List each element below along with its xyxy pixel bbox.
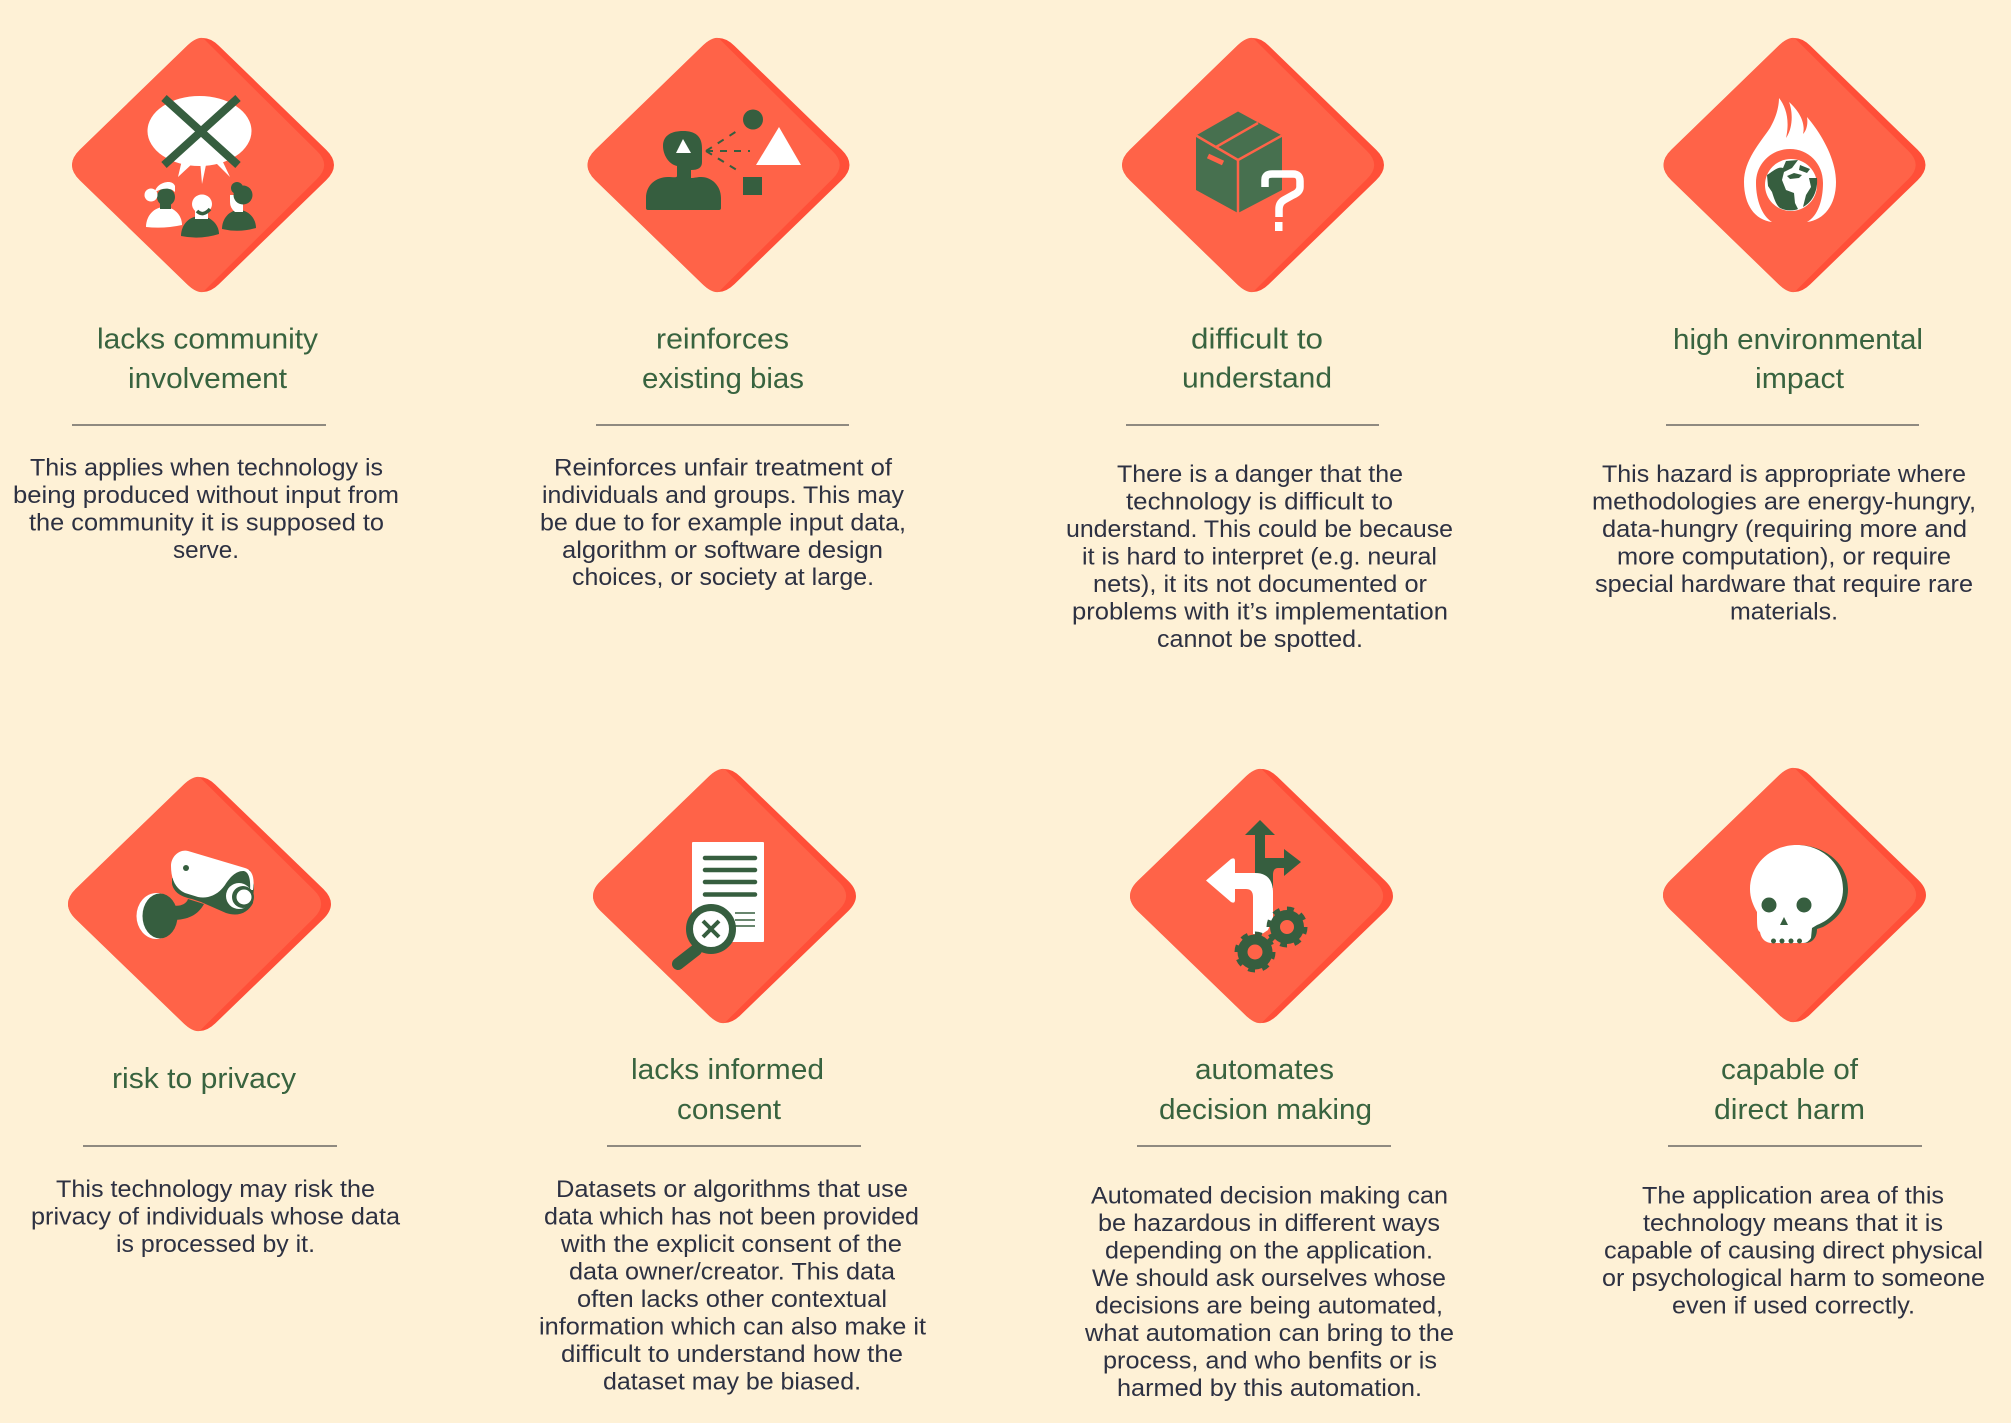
description: be hazardous in different ways [1098,1210,1440,1237]
description [13,454,399,564]
description: with the explicit consent of the [560,1231,902,1258]
description: We should ask ourselves whose [1092,1265,1446,1292]
icon: security camera [136,851,254,939]
description: capable of causing direct physical [1604,1238,1983,1264]
description: understand. This could be because [1066,516,1453,543]
diamond badge [72,38,334,292]
heading: difficult to [1191,324,1323,356]
icon: crossed-out speech bubble above three people [144,96,256,238]
description: problems with it’s implementation [1072,598,1448,626]
description: materials. [1730,598,1838,626]
heading: impact [1755,363,1844,395]
description: even if used correctly. [1672,1292,1915,1320]
description: This technology may risk the [56,1176,375,1203]
description: choices, or society at large. [572,564,874,591]
panel: lacks community involvement [13,38,399,564]
heading [1714,1054,1865,1126]
description: Reinforces unfair treatment of [554,454,892,482]
panel: high environmental impact [1592,38,1976,626]
heading: risk to privacy [112,1063,297,1095]
description: This applies when technology is [30,454,383,482]
heading: direct harm [1714,1094,1865,1126]
diamond badge [1663,768,1926,1022]
panel: difficult to understand [1066,38,1453,653]
heading: understand [1182,362,1332,394]
description: There is a danger that the [1117,461,1403,488]
description: difficult to understand how the [561,1341,903,1368]
description: process, and who benfits or is [1103,1348,1437,1374]
description: Automated decision making can [1091,1182,1448,1210]
description: data which has not been provided [544,1204,919,1230]
description: is processed by it. [116,1231,315,1258]
heading: lacks community [97,324,319,356]
heading [97,324,319,395]
description [1592,461,1976,626]
diamond badge [1664,38,1926,292]
heading [1159,1054,1372,1126]
description: privacy of individuals whose data [31,1204,400,1230]
description: cannot be spotted. [1157,626,1363,653]
description: harmed by this automation. [1117,1375,1422,1402]
description: data-hungry (requiring more and [1602,516,1967,543]
description: what automation can bring to the [1084,1320,1454,1347]
description: or psychological harm to someone [1602,1265,1985,1292]
diamond badge [593,769,856,1023]
description: dataset may be biased. [603,1368,861,1396]
heading: high environmental [1673,324,1923,356]
icon: box with question mark [1196,112,1300,231]
diamond badge [1122,38,1384,292]
description: nets), it its not documented or [1093,571,1427,598]
description: often lacks other contextual [577,1286,887,1313]
description [1084,1182,1454,1402]
heading: capable of [1721,1054,1858,1086]
description: Datasets or algorithms that use [556,1176,908,1203]
description [1066,461,1453,653]
panel: risk to privacy [31,777,400,1258]
description: decisions are being automated, [1095,1292,1443,1320]
heading: existing bias [642,363,804,395]
heading: consent [677,1094,781,1126]
description [539,1176,926,1396]
heading [1673,324,1923,395]
icon: skull [1750,845,1848,944]
diamond badge [588,38,850,292]
description: data owner/creator. This data [569,1258,895,1286]
description: individuals and groups. This may [542,482,905,509]
panel: automates decision making [1084,769,1454,1402]
description: being produced without input from [13,482,399,509]
heading: involvement [128,363,287,395]
icon: document under magnifier with cross [678,842,764,964]
description: depending on the application. [1105,1238,1433,1264]
description: This hazard is appropriate where [1602,461,1966,488]
panel: reinforces existing bias [540,38,906,591]
description: The application area of this [1642,1182,1944,1210]
description: methodologies are energy-hungry, [1592,488,1976,516]
description: be due to for example input data, [540,510,906,536]
description [1602,1182,1985,1320]
heading: reinforces [656,324,789,356]
description: the community it is supposed to [29,510,384,536]
description: special hardware that require rare [1595,571,1973,598]
panel: lacks informed consent [539,769,926,1396]
heading [642,324,804,395]
diamond badge [68,777,331,1031]
heading [1182,324,1332,394]
description: it is hard to interpret (e.g. neural [1082,544,1437,570]
description: information which can also make it [539,1314,926,1340]
description [31,1176,400,1258]
description: technology is difficult to [1126,488,1393,516]
heading: decision making [1159,1094,1372,1126]
icon: branching arrows and gears [1206,820,1306,970]
description: more computation), or require [1617,544,1951,570]
heading: lacks informed [631,1054,824,1086]
panel: capable of direct harm [1602,768,1985,1320]
diamond badge [1130,769,1393,1023]
description: technology means that it is [1643,1210,1943,1237]
heading [631,1054,824,1126]
description: serve. [173,537,239,564]
description: algorithm or software design [562,537,883,564]
heading: automates [1195,1054,1334,1086]
description [540,454,906,591]
icon: person seeing shapes [646,110,801,210]
icon: earth in flames [1744,98,1836,222]
